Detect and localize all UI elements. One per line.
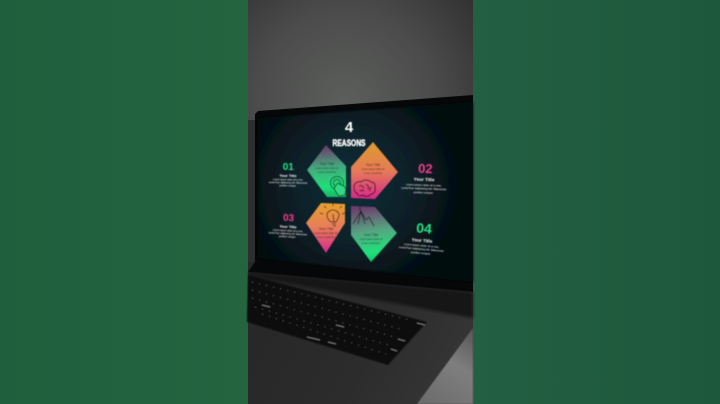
segment 4 green pentagon: a met, conseTuer xyxy=(362,242,380,245)
callout 01 xyxy=(269,162,308,188)
callout 04: 04 xyxy=(416,219,433,237)
callout 02: porttitor congue. xyxy=(413,190,434,195)
callout 04: conseTuer adipiscing elit. Maecenas xyxy=(399,245,444,253)
callout 03 xyxy=(268,212,309,240)
keyboard xyxy=(247,275,427,365)
key legends xyxy=(252,282,410,354)
callout 01: 01 xyxy=(283,162,294,173)
screen title: 4 xyxy=(345,119,354,136)
callout 04: Your Title xyxy=(411,237,433,244)
segment 3 orange pentagon xyxy=(306,203,345,253)
callout 01: Your Title xyxy=(279,174,297,178)
left green panel xyxy=(0,0,248,404)
segment 1 green pentagon: Your Title xyxy=(320,162,334,166)
screen title: REASONS xyxy=(332,138,366,149)
callout 02: Your Title xyxy=(414,177,435,182)
callout 01: conseTuer adipiscing elit. Maecenas xyxy=(269,181,308,185)
left wall strip shade xyxy=(248,120,255,275)
segment 3 orange pentagon: Your Title xyxy=(319,227,333,231)
segment 1 green pentagon: a met, conseTuer xyxy=(318,171,336,174)
segment 4 green pentagon: Lorem ipsum dolor sit xyxy=(360,238,383,241)
screen title xyxy=(332,119,366,149)
callout 02: 02 xyxy=(418,161,433,176)
segment 2 orange pentagon: Lorem ipsum dolor sit xyxy=(362,168,385,171)
icon: brain xyxy=(354,180,375,196)
callout 03: 03 xyxy=(283,213,295,224)
callout 02 xyxy=(401,160,448,195)
callout 01: porttitor congue. xyxy=(279,184,297,188)
long keys xyxy=(262,305,425,351)
right green panel xyxy=(473,0,720,404)
callout 02: conseTuer adipiscing elit. Maecenas xyxy=(401,186,447,191)
callout 03: Lorem ipsum dolor sit a met, xyxy=(273,229,303,233)
callout 04: porttitor congue. xyxy=(411,250,431,256)
segment 1 green pentagon xyxy=(307,145,346,197)
callout 02: Lorem ipsum dolor sit a met, xyxy=(406,182,442,188)
segment 1 green pentagon: Lorem ipsum dolor sit xyxy=(316,167,339,170)
icon: light bulb xyxy=(320,203,345,226)
segment 2 orange pentagon xyxy=(351,142,398,199)
callout 04 xyxy=(398,218,447,257)
laptop hinge shadow xyxy=(248,272,473,318)
laptop screen xyxy=(248,95,473,292)
desk corner xyxy=(417,328,473,404)
callout 01: Lorem ipsum dolor sit a met, xyxy=(273,178,303,182)
segment 4 green pentagon xyxy=(351,206,397,262)
background wall xyxy=(248,0,473,270)
callout 04: Lorem ipsum dolor sit a met, xyxy=(404,242,439,249)
callout 03: Your Title xyxy=(279,225,297,229)
callout 03: conseTuer adipiscing elit. Maecenas xyxy=(268,231,308,237)
icon: mountains xyxy=(353,206,374,226)
callout 03: porttitor congue. xyxy=(279,235,297,239)
segment 3 orange pentagon: Lorem ipsum dolor sit xyxy=(315,232,338,235)
segment 3 orange pentagon: a met, conseTuer xyxy=(317,236,335,239)
laptop base xyxy=(248,262,473,404)
segment 2 orange pentagon: Your Title xyxy=(366,163,380,167)
icon: hand touch xyxy=(330,176,346,196)
segment 2 orange pentagon: a met, conseTuer xyxy=(364,172,382,175)
segment 4 green pentagon: Your Title xyxy=(364,233,378,237)
